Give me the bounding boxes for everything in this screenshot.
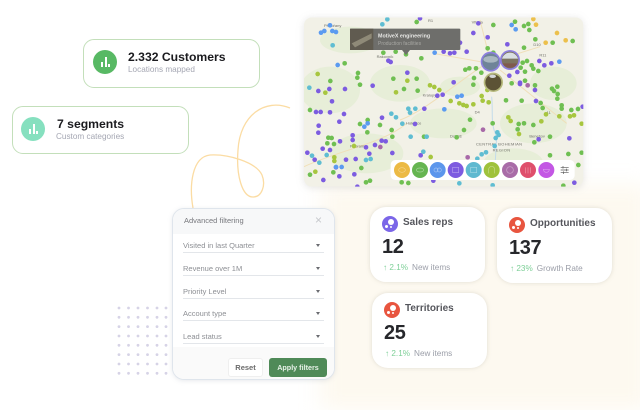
territories label: Territories: [405, 303, 454, 314]
map dots: yellow and magenta: [378, 17, 568, 160]
map place labels: CENTRAL BOHEMIAN: [476, 142, 522, 147]
sales reps label: Sales reps: [403, 217, 453, 228]
map dots: green: [308, 19, 584, 188]
map place labels: Příbořany: [324, 23, 341, 28]
customers heading: 2.332 Customers: [128, 50, 226, 64]
map dots: blue: [319, 23, 562, 169]
icon: customers bar chart: [93, 50, 117, 74]
map dots: lime: [313, 72, 584, 174]
map place labels: D10: [533, 42, 541, 47]
map place labels: D4: [475, 110, 481, 115]
territories value: 25: [384, 322, 405, 344]
map place labels: Benešov: [529, 134, 545, 139]
apply filters button: [269, 358, 327, 377]
map place labels: Dobříš: [450, 134, 462, 139]
map place labels: Vltava: [472, 19, 484, 24]
territories change: ↑ 2.1% New items: [385, 349, 452, 358]
filter: visited: [183, 238, 324, 253]
decorative dot grid: [118, 306, 168, 375]
opportunities change: ↑ 23% Growth Rate: [510, 264, 583, 273]
segments subtitle: Custom categories: [56, 132, 124, 141]
opportunities label: Opportunities: [530, 218, 596, 229]
icon: opportunities: [509, 217, 525, 233]
map panel: [302, 16, 586, 190]
filter: revenue: Revenue over 1M: [183, 264, 242, 273]
opportunities value: 137: [509, 237, 541, 259]
metric card: territories: [372, 293, 487, 368]
metric card: sales reps: [370, 207, 485, 282]
map photo pins: [481, 50, 520, 92]
decorative orange curve: [190, 104, 290, 208]
stat card: segments: [12, 106, 189, 154]
map tooltip: Production facilities: [378, 41, 422, 47]
map place labels: REGION: [493, 147, 510, 152]
filter header: [173, 209, 336, 234]
icon: segments bar chart: [21, 117, 45, 141]
map place labels: Rakovník: [377, 54, 393, 59]
segments heading: 7 segments: [57, 117, 124, 131]
filter: revenue: [183, 261, 324, 276]
sales reps change: ↑ 2.1% New items: [383, 263, 450, 272]
map place labels: Holešice: [406, 120, 422, 125]
map place labels: Příbram: [350, 143, 365, 148]
filter title: Advanced filtering: [184, 216, 244, 225]
stat card: customers: [83, 39, 260, 88]
reset button: Reset: [235, 363, 256, 372]
map category toolbar: [391, 160, 575, 180]
icon: sales reps: [382, 216, 398, 232]
filter: visited: Visited in last Quarter: [183, 241, 255, 250]
icon: territories: [384, 302, 400, 318]
map place labels: R11: [539, 52, 547, 57]
map place labels: [324, 18, 552, 152]
map dots: teal: [307, 17, 501, 188]
map place labels: Kralupy: [423, 93, 436, 98]
filter: priority: Priority Level: [183, 287, 226, 296]
sales reps value: 12: [382, 236, 403, 258]
map tooltip: MotiveX engineering: [378, 33, 430, 39]
map tooltip: [350, 29, 460, 55]
filter: lead status: Lead status: [183, 332, 222, 341]
map place labels: 11: [547, 110, 552, 115]
close icon: ×: [315, 213, 322, 227]
filter: account type: [183, 306, 324, 321]
filter panel: [172, 208, 335, 380]
apply filters button: Apply filters: [277, 363, 319, 372]
customers subtitle: Locations mapped: [128, 65, 195, 74]
metric card: opportunities: [497, 208, 612, 283]
filter: priority: [183, 284, 324, 299]
reset button: [228, 358, 263, 377]
background: cream glow: [320, 185, 640, 410]
filter: account type: Account type: [183, 309, 226, 318]
map dots: purple: [305, 16, 585, 189]
filter: lead status: [183, 329, 324, 344]
map place labels: R1: [428, 18, 434, 23]
filter footer: [173, 347, 336, 381]
